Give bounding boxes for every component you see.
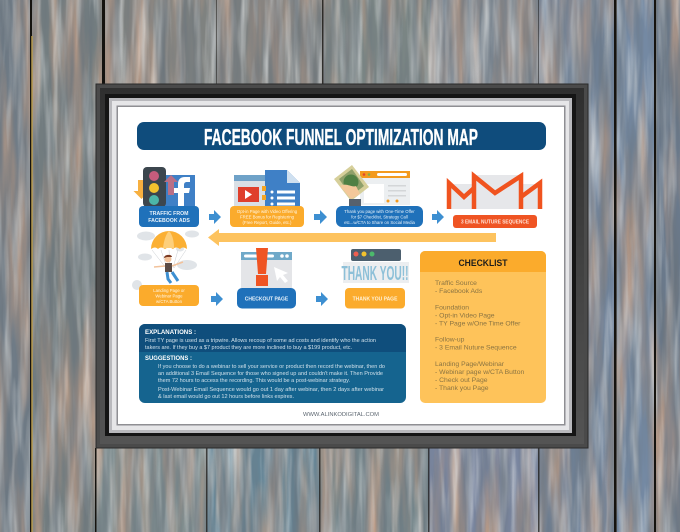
- box: landing page: Landing Page or: [153, 288, 185, 293]
- box: landing page: [139, 285, 199, 306]
- box: opt-in page: Opt-in Page with Video Offering: [237, 209, 298, 214]
- arrow: [211, 292, 223, 306]
- box: thank you page with offer: [336, 206, 423, 227]
- icon: money and offer page: [334, 165, 410, 206]
- heading: suggestions: SUGGESTIONS :: [145, 355, 192, 362]
- text: checklist items: [435, 280, 525, 392]
- box: thank you page with offer: Thank you page with One-Time Offer: [344, 209, 415, 214]
- box: 3 email sequence: 3 EMAIL NUTURE SEQUENCE: [461, 220, 530, 226]
- white poster: [118, 107, 564, 424]
- arrow: [316, 292, 328, 306]
- text: checklist items: Traffic Source: [435, 280, 477, 287]
- icon: checkout page: [241, 248, 292, 288]
- text: checklist items: Foundation: [435, 304, 469, 312]
- heading: checklist: CHECKLIST: [458, 258, 508, 269]
- text: suggestions body: Post-Webinar Email Sequence would go out 1 day after webinar, then 2 days after webinar: [158, 387, 384, 393]
- picture frame: [96, 84, 588, 448]
- text: checklist items: - Check out Page: [435, 377, 488, 384]
- panel: checklist: [420, 251, 546, 403]
- box: 3 email sequence: [453, 215, 537, 228]
- text: suggestions body: [158, 364, 385, 400]
- text: checklist items: - 3 Email Nuture Sequence: [435, 344, 517, 352]
- box: traffic from facebook ads: TRAFFIC FROM: [150, 211, 188, 217]
- box: opt-in page: [230, 206, 304, 227]
- box: checkout page: CHECKOUT PAGE: [245, 296, 289, 302]
- icon: thank you window: [342, 249, 409, 285]
- box: opt-in page: (Free Report, Guide, etc.): [243, 220, 292, 225]
- box: thank you page: THANK YOU PAGE: [353, 296, 398, 302]
- text: suggestions body: If you choose to do a webinar to sell your service or product then record the webinar, then do: [158, 364, 385, 370]
- box: thank you page with offer: for $7 Checklist, Strategy Call: [351, 214, 408, 220]
- box: opt-in page: FREE Bonus for Registering: [240, 214, 295, 220]
- text: suggestions body: them 72 hours to access the recording. This would be a post-webinar strategy.: [158, 378, 350, 384]
- text: checklist items: - TY Page w/One Time Offer: [435, 320, 521, 328]
- box: checkout page: [237, 288, 296, 308]
- box: landing page: Webinar Page: [155, 294, 183, 298]
- arrow: [209, 210, 221, 224]
- box: traffic from facebook ads: FACEBOOK ADS: [148, 218, 190, 224]
- text: checklist items: - Webinar page w/CTA Button: [435, 369, 525, 376]
- title banner: FACEBOOK FUNNEL OPTIMIZATION MAP: [204, 124, 478, 150]
- text: explanations body: [145, 338, 376, 351]
- text: checklist items: Landing Page/Webinar: [435, 361, 505, 368]
- title banner: [137, 122, 546, 150]
- text: explanations body: takers are. If they buy a $7 product they are more inclined to buy a $199 product, etc.: [145, 345, 352, 351]
- box: landing page: w/CTA Button: [156, 299, 183, 304]
- text: suggestions body: & last email would go out 12 hours before links expires.: [158, 394, 294, 400]
- text: suggestions body: an additional 3 Email Sequence for those who signed up and couldn't make it. Then Provide: [158, 371, 383, 377]
- text: checklist items: Follow-up: [435, 336, 465, 344]
- panel: explanations and suggestions: [139, 324, 406, 403]
- icon: parachuter: [132, 230, 199, 290]
- icon: three email envelopes: [449, 175, 540, 209]
- heading: explanations: EXPLANATIONS :: [145, 329, 196, 336]
- icon: thank you window: THANK YOU!!: [342, 263, 408, 285]
- text: explanations body: First TY page is used as a tripwire. Allows recoup of some ad costs and identify who the action: [145, 338, 376, 344]
- arrow: [314, 210, 327, 224]
- box: thank you page with offer: etc...w/CTA to Share on Social Media: [344, 220, 416, 225]
- box: thank you page: [345, 288, 405, 308]
- icon: video page and document: [234, 170, 300, 207]
- box: traffic from facebook ads: [139, 206, 199, 227]
- long return arrow: [208, 229, 496, 246]
- footer url: WWW.ALINKODIGITAL.COM: [303, 412, 380, 418]
- text: checklist items: - Thank you Page: [435, 385, 489, 392]
- arrow: [432, 210, 444, 224]
- text: checklist items: - Facebook Ads: [435, 288, 483, 295]
- icon: traffic light and Facebook: [134, 167, 195, 207]
- text: checklist items: - Opt-in Video Page: [435, 312, 495, 320]
